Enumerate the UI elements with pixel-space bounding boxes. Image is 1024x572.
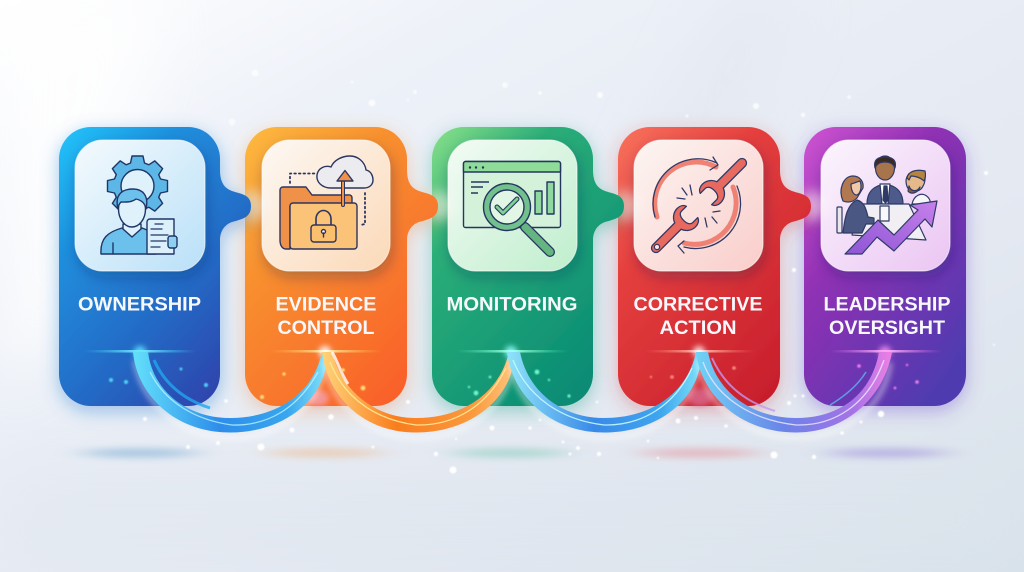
panel: corrective action: [618, 127, 827, 406]
icon: meeting and rising arrow: [837, 156, 937, 254]
label: leadership oversight: LEADERSHIP: [824, 294, 950, 316]
connector arc: ownership to evidence: [133, 352, 326, 438]
label: evidence control: EVIDENCE: [276, 294, 376, 316]
panel: leadership oversight: [804, 127, 966, 406]
label: evidence control: [276, 294, 376, 339]
label: evidence control: CONTROL: [278, 317, 375, 339]
glow lines at connector anchors: [84, 346, 942, 358]
icon tile: corrective action: [634, 140, 763, 271]
connector arc: monitoring to corrective action: [507, 352, 700, 438]
connector arc: corrective action to leadership oversight: [696, 352, 892, 438]
label: corrective action: ACTION: [660, 317, 736, 339]
label: ownership: OWNERSHIP: [78, 294, 201, 316]
icon tile: ownership: [75, 140, 205, 271]
panel: ownership: [59, 127, 267, 406]
icon tile: monitoring: [448, 140, 577, 271]
label: corrective action: [634, 294, 762, 339]
panel: monitoring: [432, 127, 640, 406]
panel: evidence control: [245, 127, 454, 406]
connector arc: evidence to monitoring: [322, 352, 513, 438]
icon: locked folder and cloud upload: [280, 156, 373, 249]
label: corrective action: CORRECTIVE: [634, 294, 762, 316]
icon: person with gear and document: [101, 156, 177, 254]
floor shadows: [82, 448, 947, 458]
icon tile: evidence control: [262, 140, 390, 271]
icon: broken wrench with cycle arrows: [644, 151, 754, 260]
card tints under connectors: [307, 388, 713, 406]
label: leadership oversight: [824, 294, 950, 339]
icon tile: leadership: [821, 140, 950, 271]
icon: dashboard with magnifier: [464, 162, 560, 252]
label: monitoring: MONITORING: [446, 294, 578, 316]
sparkles: [109, 70, 995, 474]
label: leadership oversight: OVERSIGHT: [829, 317, 945, 339]
